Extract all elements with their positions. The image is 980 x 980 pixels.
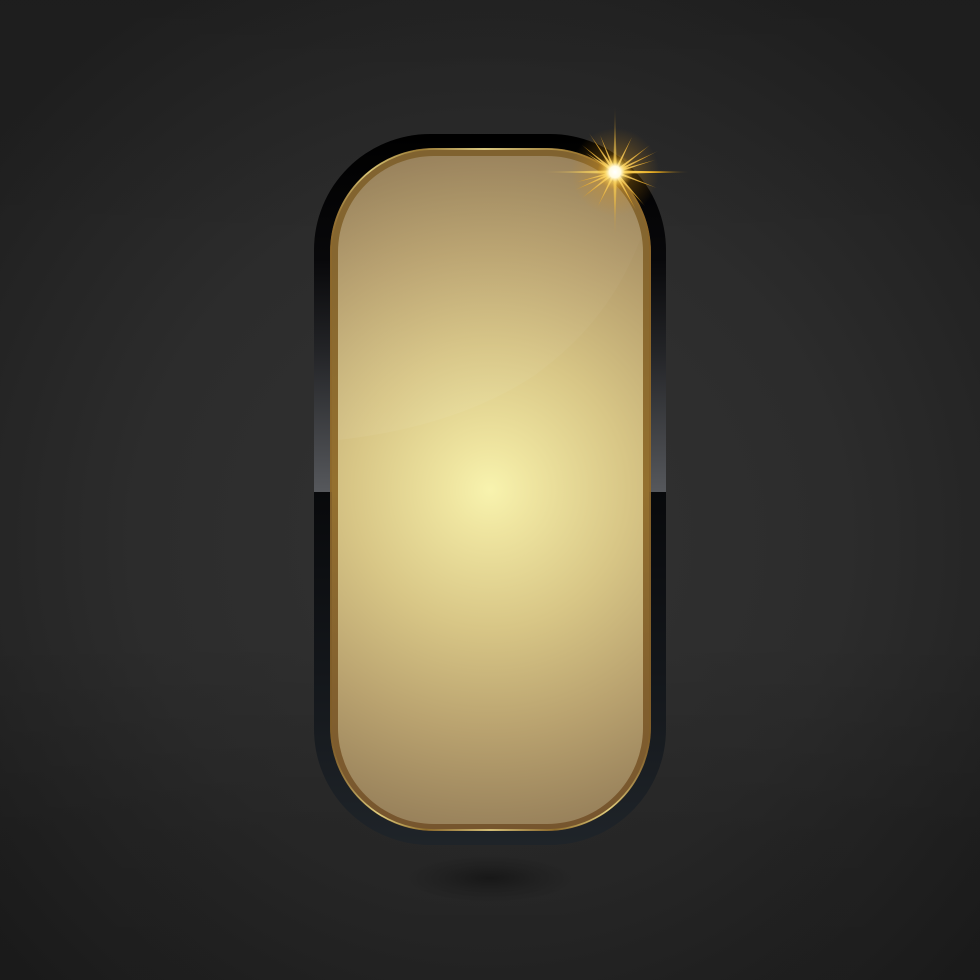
gold badge illustration (96, 110, 886, 881)
ground shadow (405, 854, 575, 902)
glass reflection (338, 156, 643, 440)
sparkle rays (540, 105, 690, 238)
sparkle (540, 105, 690, 238)
sparkle halo (571, 128, 659, 216)
sparkle core (597, 154, 633, 190)
golden glass panel (338, 156, 643, 824)
gold ring (330, 148, 651, 831)
outer dark frame (314, 134, 666, 845)
